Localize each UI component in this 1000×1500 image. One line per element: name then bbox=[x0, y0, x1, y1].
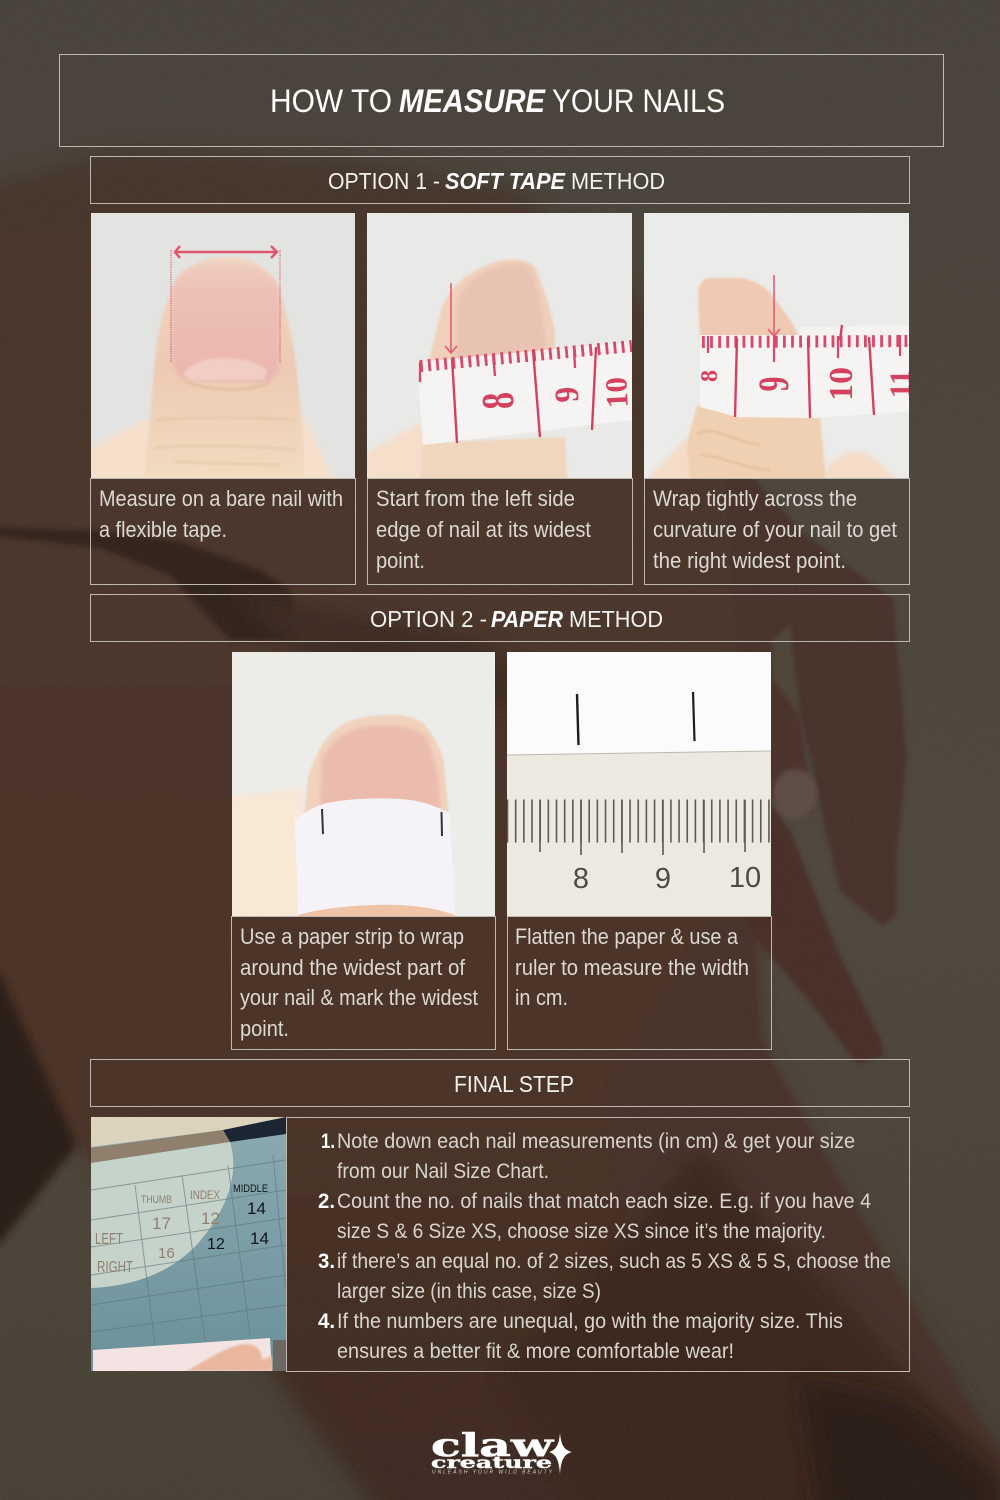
photo: tape wrapped around nail: 10 bbox=[823, 367, 860, 401]
panel: step left edge bbox=[366, 213, 635, 584]
caption bbox=[508, 916, 772, 1050]
photo: handwritten nail chart on tablet: 14 bbox=[250, 1229, 269, 1248]
heading: option 1: METHOD bbox=[571, 168, 665, 194]
photo: paper against ruler bbox=[499, 652, 771, 916]
panel: paper strip bbox=[228, 652, 496, 1050]
caption: edge of nail at its widest bbox=[376, 517, 591, 542]
photo: thumb with width arrow bbox=[88, 213, 355, 482]
panel: ruler bbox=[499, 652, 772, 1050]
photo: tape on nail from the left: 8 bbox=[472, 391, 524, 411]
photo: tape wrapped around nail bbox=[644, 213, 917, 480]
title box: MEASURE bbox=[399, 83, 547, 119]
caption: the right widest point. bbox=[653, 548, 846, 573]
caption: point. bbox=[240, 1016, 289, 1041]
title box: YOUR NAILS bbox=[552, 83, 725, 119]
photo: handwritten nail chart on tablet: 16 bbox=[158, 1245, 175, 1262]
nail bbox=[773, 769, 817, 819]
caption: around the widest part of bbox=[240, 955, 466, 980]
panel: final step instructions: 2. bbox=[318, 1189, 335, 1213]
heading: option 2 bbox=[90, 594, 910, 642]
title box: HOW TO bbox=[270, 83, 392, 119]
panel: final step instructions: larger size (in this case, size S) bbox=[337, 1279, 601, 1303]
panel: step wrap bbox=[644, 213, 917, 584]
photo: paper against ruler: 10 bbox=[729, 862, 761, 894]
panel: final step instructions: if there’s an equal no. of 2 sizes, such as 5 XS & 5 S, choose the bbox=[337, 1249, 891, 1273]
photo: tape on nail from the left: 9 bbox=[548, 386, 587, 403]
logo: claw creature bbox=[431, 1426, 572, 1476]
photo: handwritten nail chart on tablet: RIGHT bbox=[97, 1259, 133, 1276]
caption: Start from the left side bbox=[376, 486, 575, 511]
title box bbox=[60, 54, 944, 146]
photo: tape wrapped around nail: 9 bbox=[751, 376, 798, 392]
heading: option 1 bbox=[90, 156, 910, 204]
caption: Wrap tightly across the bbox=[653, 486, 857, 511]
caption bbox=[368, 478, 632, 584]
panel: step bare nail bbox=[88, 213, 356, 584]
caption: Measure on a bare nail with bbox=[99, 486, 343, 511]
panel: final step instructions: Note down each nail measurements (in cm) & get your size bbox=[337, 1129, 855, 1153]
panel: final step instructions bbox=[286, 1118, 910, 1372]
caption: Use a paper strip to wrap bbox=[240, 924, 464, 949]
photo: handwritten nail chart on tablet bbox=[91, 1117, 286, 1371]
panel: final step instructions: 3. bbox=[318, 1249, 335, 1273]
caption bbox=[90, 478, 356, 584]
photo: handwritten nail chart on tablet: 12 bbox=[201, 1209, 220, 1228]
photo: handwritten nail chart on tablet: 12 bbox=[207, 1236, 225, 1253]
photo: paper against ruler: 8 bbox=[573, 863, 589, 895]
caption: your nail & mark the widest bbox=[240, 985, 478, 1010]
panel: final step instructions: ensures a better fit & more comfortable wear! bbox=[337, 1339, 734, 1363]
caption: in cm. bbox=[515, 985, 568, 1010]
heading: option 1: OPTION 1 - bbox=[328, 168, 440, 194]
photo: paper against ruler: 9 bbox=[655, 863, 671, 895]
panel: final step instructions: 1. bbox=[321, 1129, 335, 1153]
caption: Flatten the paper & use a bbox=[515, 924, 739, 949]
panel: final step instructions: Count the no. of nails that match each size. E.g. if you have 4 bbox=[337, 1189, 871, 1213]
caption: ruler to measure the width bbox=[515, 955, 749, 980]
panel: final step instructions: 4. bbox=[318, 1309, 335, 1333]
heading: final step bbox=[90, 1060, 910, 1106]
panel: final step instructions: size S & 6 Size XS, choose size XS since it’s the majority. bbox=[337, 1219, 826, 1243]
photo: handwritten nail chart on tablet: LEFT bbox=[95, 1231, 123, 1248]
logo: claw creature: claw bbox=[431, 1426, 555, 1464]
heading: option 1: SOFT TAPE bbox=[445, 168, 566, 194]
logo: claw creature: UNLEASH YOUR WILD BEAUTY bbox=[432, 1470, 553, 1476]
heading: option 2: OPTION 2 - bbox=[370, 606, 487, 632]
heading: option 2: PAPER bbox=[491, 606, 563, 632]
logo: claw creature: creature bbox=[431, 1453, 552, 1472]
photo: tape wrapped around nail: 11 bbox=[884, 370, 917, 398]
heading: final step: FINAL STEP bbox=[454, 1071, 574, 1097]
photo: handwritten nail chart on tablet: THUMB bbox=[141, 1194, 172, 1206]
caption bbox=[232, 916, 496, 1050]
photo: tape wrapped around nail: 8 bbox=[697, 370, 723, 382]
caption bbox=[644, 478, 910, 584]
caption: curvature of your nail to get bbox=[653, 517, 897, 542]
caption: a flexible tape. bbox=[99, 517, 227, 542]
photo: handwritten nail chart on tablet: 14 bbox=[247, 1199, 266, 1218]
panel: final step instructions: If the numbers are unequal, go with the majority size. This bbox=[337, 1309, 843, 1333]
photo: handwritten nail chart on tablet: INDEX bbox=[190, 1188, 220, 1202]
panel: final step instructions: from our Nail Size Chart. bbox=[337, 1159, 549, 1183]
photo: paper strip around nail bbox=[228, 652, 495, 920]
photo: tape on nail from the left bbox=[366, 213, 635, 482]
photo: handwritten nail chart on tablet: MIDDLE bbox=[233, 1183, 268, 1195]
photo: tape on nail from the left: 10 bbox=[598, 376, 635, 409]
heading: option 2: METHOD bbox=[569, 606, 663, 632]
caption: point. bbox=[376, 548, 425, 573]
photo: handwritten nail chart on tablet: 17 bbox=[152, 1214, 171, 1233]
